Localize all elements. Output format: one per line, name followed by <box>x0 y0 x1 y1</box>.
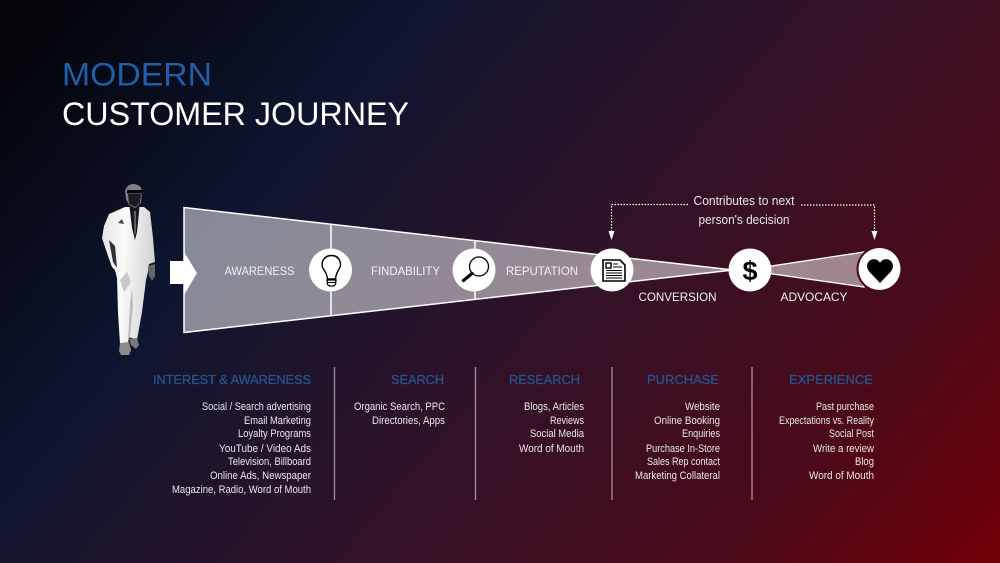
funnel: awareness to conversion <box>184 208 733 332</box>
column: search: SEARCH <box>391 373 444 387</box>
column: experience <box>779 373 874 482</box>
title <box>62 56 409 132</box>
icon: light bulb <box>309 248 352 292</box>
column: search: Directories, Apps <box>372 415 445 427</box>
column: purchase: Sales Rep contact <box>647 456 720 468</box>
column: experience: Blog <box>855 456 874 468</box>
column: purchase: Enquiries <box>682 428 720 440</box>
column: experience: Expectations vs. Reality <box>779 415 874 427</box>
column: interest and awareness: YouTube / Video Ads <box>219 443 311 455</box>
column: purchase: PURCHASE <box>647 373 719 387</box>
column: research: Reviews <box>550 415 584 427</box>
column dividers <box>334 367 752 500</box>
column: interest and awareness: Loyalty Programs <box>238 428 311 440</box>
column: experience: Write a review <box>813 443 874 455</box>
icon: magnifier <box>452 248 496 292</box>
feedback caption: person's decision <box>698 212 790 227</box>
icon: heart <box>856 246 902 292</box>
icon: dollar: $ <box>742 256 758 286</box>
stage label: findability: FINDABILITY <box>371 266 440 278</box>
column: interest and awareness <box>153 373 311 496</box>
column: purchase: Website <box>685 401 720 413</box>
column: research: RESEARCH <box>509 373 580 387</box>
column: purchase: Online Booking <box>654 415 720 427</box>
column: experience: Social Post <box>829 428 874 440</box>
column: experience: EXPERIENCE <box>789 373 873 387</box>
column: interest and awareness: Email Marketing <box>244 415 311 427</box>
stage label: reputation: REPUTATION <box>506 266 578 278</box>
column: experience: Past purchase <box>816 401 874 413</box>
feedback caption: Contributes to next <box>694 193 795 208</box>
feedback arrow: right <box>801 205 878 240</box>
column: interest and awareness: Online Ads, Newspaper <box>210 470 311 482</box>
column: research: Social Media <box>530 428 585 440</box>
stage label: awareness: AWARENESS <box>224 266 295 278</box>
column: purchase: Purchase In-Store <box>646 443 720 455</box>
column: research: Word of Mouth <box>519 443 584 455</box>
feedback caption <box>694 193 795 227</box>
column: purchase <box>635 373 720 482</box>
column: research: Blogs, Articles <box>524 401 584 413</box>
column: interest and awareness: Magazine, Radio, Word of Mouth <box>172 484 311 496</box>
funnel: advocacy <box>745 252 864 287</box>
column: purchase: Marketing Collateral <box>635 470 720 482</box>
figure: man in white suit <box>102 184 155 355</box>
title: MODERN <box>62 56 212 92</box>
icon: newspaper <box>590 248 634 292</box>
title: CUSTOMER JOURNEY <box>62 96 409 132</box>
column: interest and awareness: Television, Billboard <box>228 456 311 468</box>
stage label: advocacy: ADVOCACY <box>780 292 848 304</box>
column: experience: Word of Mouth <box>809 470 874 482</box>
column: search <box>354 373 445 427</box>
feedback arrow: left <box>608 204 688 240</box>
column: search: Organic Search, PPC <box>354 401 445 413</box>
column: interest and awareness: Social / Search advertising <box>202 401 311 413</box>
column: research <box>509 373 585 455</box>
column: interest and awareness: INTEREST & AWARENESS <box>153 373 311 387</box>
entry arrow <box>170 252 197 295</box>
icon: dollar <box>728 248 772 292</box>
stage label: conversion: CONVERSION <box>638 292 716 304</box>
